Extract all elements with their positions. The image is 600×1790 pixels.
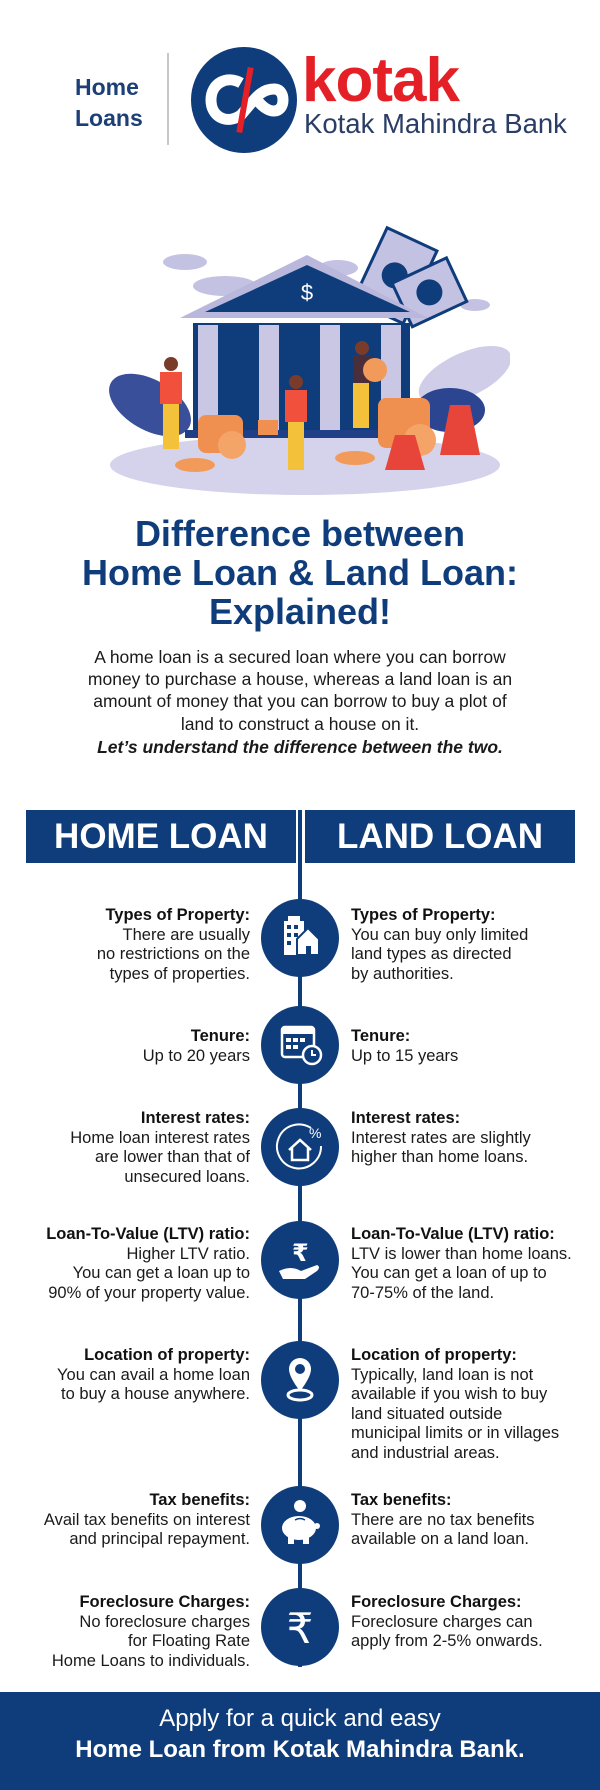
title: Difference between	[135, 513, 465, 554]
land: types	[351, 906, 528, 982]
home: foreclosure: Home Loans to individuals.	[52, 1652, 250, 1670]
intro text: amount of money that you can borrow to buy a plot of	[93, 691, 507, 711]
land: types: Types of Property:	[351, 906, 496, 924]
icon: buildings	[261, 899, 339, 977]
timeline line	[298, 810, 302, 1667]
icon: map pin	[261, 1341, 339, 1419]
home: foreclosure: for Floating Rate	[128, 1632, 250, 1650]
land: LTV: Loan-To-Value (LTV) ratio:	[351, 1225, 555, 1243]
home: interest	[70, 1109, 250, 1186]
icon: rupee hand: ₹	[292, 1239, 309, 1267]
land: LTV: You can get a loan of up to	[351, 1264, 547, 1282]
row: foreclosure	[52, 1588, 543, 1670]
home: tax: Tax benefits:	[149, 1491, 250, 1509]
home: location: You can avail a home loan	[57, 1366, 250, 1384]
row: interest rates	[70, 1108, 531, 1186]
land: tax	[351, 1491, 534, 1548]
money notes	[353, 228, 437, 323]
land: tenure: Tenure:	[351, 1027, 410, 1045]
home: tax	[44, 1491, 250, 1548]
icon: rupee	[261, 1588, 339, 1666]
title: Home Loan & Land Loan:	[82, 552, 518, 593]
land: location: and industrial areas.	[351, 1444, 500, 1462]
home: location	[57, 1346, 250, 1403]
land: location: land situated outside	[351, 1404, 502, 1422]
home: tax: and principal repayment.	[69, 1530, 250, 1548]
home: foreclosure: No foreclosure charges	[79, 1612, 250, 1630]
home: types: There are usually	[123, 926, 250, 944]
row: LTV	[46, 1221, 572, 1302]
home: types: types of properties.	[110, 964, 250, 982]
land: foreclosure: apply from 2-5% onwards.	[351, 1632, 543, 1650]
divider	[167, 53, 169, 145]
intro text: money to purchase a house, whereas a land loan is an	[88, 669, 512, 689]
land: location: Location of property:	[351, 1346, 517, 1364]
home: tax: Avail tax benefits on interest	[44, 1510, 250, 1528]
header: HOME LOAN	[26, 810, 296, 863]
land: LTV: 70-75% of the land.	[351, 1284, 494, 1302]
logo header	[75, 46, 567, 153]
header: LAND LOAN: LAND LOAN	[337, 817, 543, 856]
land: tenure: Up to 15 years	[351, 1046, 458, 1064]
home: tenure: Tenure:	[191, 1027, 250, 1045]
home: LTV: 90% of your property value.	[48, 1284, 250, 1302]
home: tenure	[143, 1027, 250, 1064]
home: LTV	[46, 1225, 250, 1302]
home: interest: Interest rates:	[141, 1109, 250, 1127]
row: tax benefits	[44, 1486, 534, 1564]
land: tax: Tax benefits:	[351, 1491, 452, 1509]
coins	[198, 415, 243, 453]
land: LTV: LTV is lower than home loans.	[351, 1244, 572, 1262]
home: foreclosure: Foreclosure Charges:	[79, 1593, 250, 1611]
land: interest: Interest rates are slightly	[351, 1128, 531, 1146]
icon: rupee hand	[261, 1221, 339, 1299]
land: LTV	[351, 1225, 572, 1302]
land: foreclosure	[351, 1593, 543, 1650]
land: interest: higher than home loans.	[351, 1148, 528, 1166]
home: types: Types of Property:	[105, 906, 250, 924]
home: types	[97, 906, 250, 982]
home: tenure: Up to 20 years	[143, 1046, 250, 1064]
footer banner	[0, 1692, 600, 1790]
icon: piggy bank	[261, 1486, 339, 1564]
text: kotak: kotak	[302, 46, 459, 115]
people	[160, 372, 182, 404]
title	[82, 513, 518, 632]
title: Explained!	[209, 591, 391, 632]
land: tax: available on a land loan.	[351, 1530, 529, 1548]
row: location	[57, 1341, 559, 1462]
icon: calendar	[261, 1006, 339, 1084]
intro text: A home loan is a secured loan where you can borrow	[94, 647, 506, 667]
icon: kotak logo circle	[191, 47, 297, 153]
text: Home Loans: Home	[75, 74, 139, 100]
home: interest: unsecured loans.	[124, 1168, 250, 1186]
land: interest: Interest rates:	[351, 1109, 460, 1127]
text: Kotak Mahindra Bank: Kotak Mahindra Bank	[304, 108, 567, 139]
home: interest: Home loan interest rates	[70, 1128, 250, 1146]
header: HOME LOAN: HOME LOAN	[54, 817, 268, 856]
text: Home Loans: Loans	[75, 105, 143, 131]
intro text: Let’s understand the difference between the two.	[97, 737, 503, 757]
icon: house percent: %	[309, 1125, 321, 1141]
intro text	[88, 647, 512, 757]
home: LTV: Higher LTV ratio.	[126, 1244, 250, 1262]
land: location: Typically, land loan is not	[351, 1366, 533, 1384]
icon: house percent	[261, 1108, 339, 1186]
intro text: land to construct a house on it.	[181, 714, 419, 734]
land: types: by authorities.	[351, 964, 454, 982]
home: location: Location of property:	[84, 1346, 250, 1364]
land: location	[351, 1346, 559, 1462]
illustration: bank with people and coins	[109, 226, 510, 495]
home: LTV: You can get a loan up to	[73, 1264, 250, 1282]
row: tenure	[143, 1006, 458, 1084]
home: types: no restrictions on the	[97, 945, 250, 963]
ground	[110, 435, 500, 495]
row: types of property	[97, 899, 528, 982]
icon: rupee: ₹	[287, 1604, 313, 1653]
clouds	[163, 254, 207, 270]
home: interest: are lower than that of	[95, 1148, 250, 1166]
land: types: land types as directed	[351, 945, 512, 963]
header: LAND LOAN	[305, 810, 575, 863]
home: LTV: Loan-To-Value (LTV) ratio:	[46, 1225, 250, 1243]
land: location: available if you wish to buy	[351, 1385, 547, 1403]
bank	[180, 255, 428, 318]
land: interest	[351, 1109, 531, 1166]
home: location: to buy a house anywhere.	[61, 1385, 250, 1403]
home: foreclosure	[52, 1593, 250, 1670]
land: tenure	[351, 1027, 458, 1064]
land: location: municipal limits or in villages	[351, 1424, 559, 1442]
text: Home Loans	[75, 74, 143, 131]
footer banner: Apply for a quick and easy	[159, 1705, 441, 1732]
land: types: You can buy only limited	[351, 926, 528, 944]
land: foreclosure: Foreclosure charges can	[351, 1612, 533, 1630]
footer banner: Home Loan from Kotak Mahindra Bank.	[75, 1736, 525, 1763]
bags	[385, 435, 425, 470]
land: foreclosure: Foreclosure Charges:	[351, 1593, 522, 1611]
illustration: bank with people and coins: $	[301, 280, 313, 305]
leaves	[99, 361, 201, 449]
land: tax: There are no tax benefits	[351, 1510, 534, 1528]
